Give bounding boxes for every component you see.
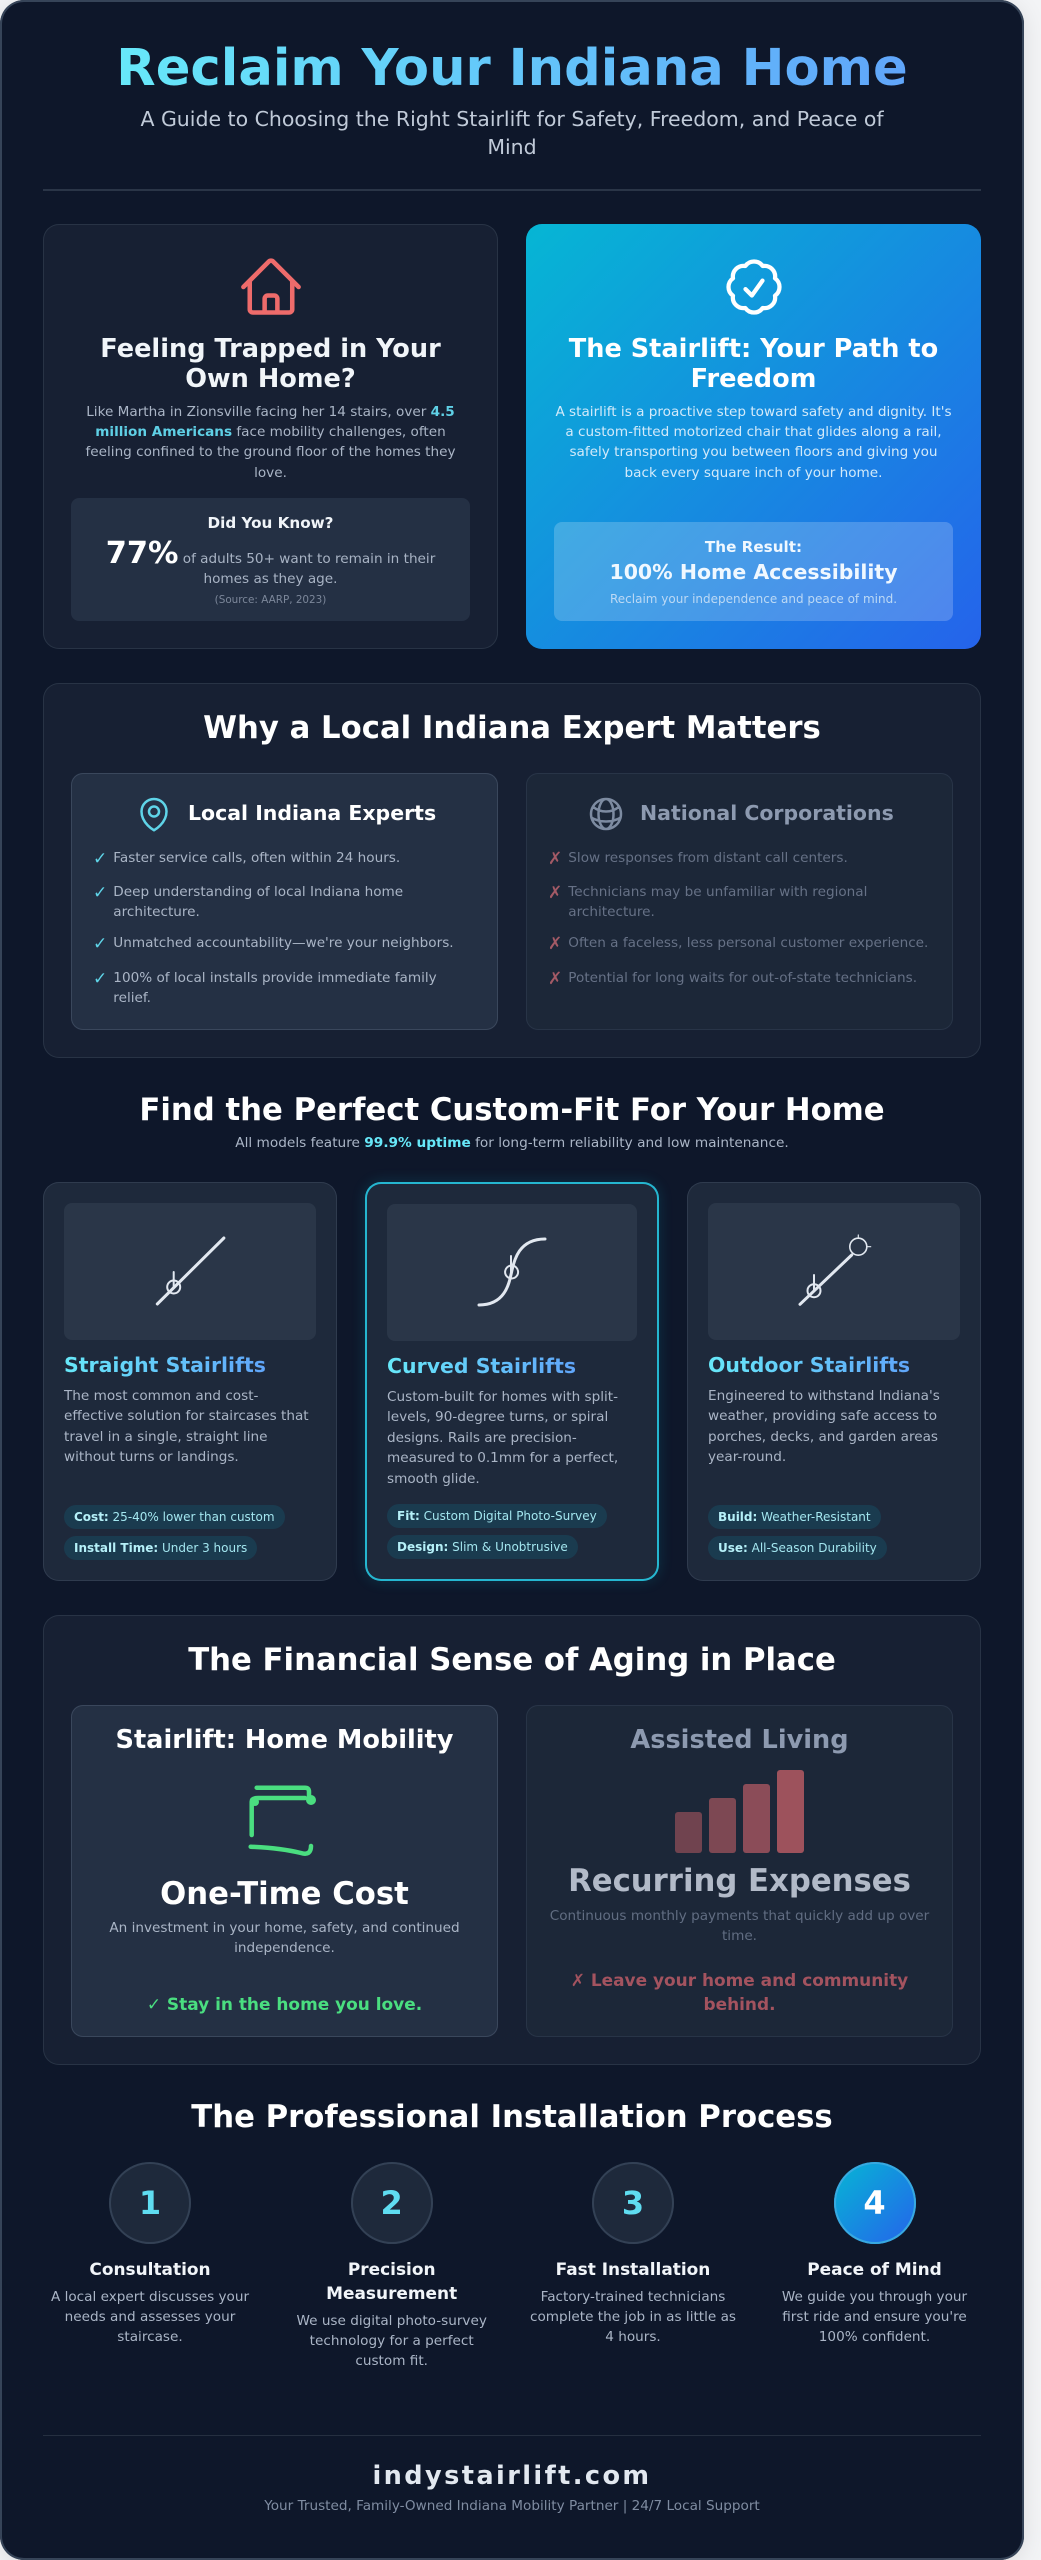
tag [708,1536,887,1560]
text block [86,404,456,481]
panel: feeling trapped [43,224,498,649]
subtitle: A Guide to Choosing the Right Stairlift for Safety, Freedom, and Peace of [140,107,884,131]
subtitle [140,107,884,159]
step 3 [530,2162,736,2345]
panel: local expert [43,683,981,1058]
icon panel: outdoor rail [708,1203,960,1340]
step number [109,2162,191,2244]
card: national corporations [526,773,953,1030]
card: curved stairlifts [365,1182,659,1581]
step text: staircase. [117,2329,183,2345]
card: assisted living [526,1705,953,2037]
card text [708,1388,940,1465]
tag: Design: Slim & Unobtrusive [397,1540,568,1554]
text block: love. [254,465,287,481]
card title: Outdoor Stairlifts [708,1353,910,1377]
tag [708,1505,881,1529]
section header: models [139,1092,885,1151]
list item: Slow responses from distant call centers. [568,850,848,866]
heading: Freedom [691,364,816,394]
card text: effective solution for staircases that [64,1408,309,1424]
drawback: behind. [703,1994,776,2014]
step 1 [51,2162,250,2345]
step number: 3 [622,2184,644,2222]
card text: levels, 90-degree turns, or spiral [387,1409,608,1425]
text block: million Americans face mobility challenges, often [95,424,446,440]
list item: Unmatched accountability—we're your neighbors. [113,935,454,951]
callout label: The Result: [705,538,802,556]
card text: Engineered to withstand Indiana's [708,1388,940,1404]
card text: smooth glide. [387,1471,480,1487]
tag [64,1536,257,1560]
callout value: 100% Home Accessibility [609,560,898,584]
step 4 [764,2161,984,2391]
description: time. [722,1928,757,1944]
list item: Potential for long waits for out-of-state technicians. [568,970,917,986]
step title [326,2258,457,2302]
text block: feeling confined to the ground floor of the homes they [86,444,456,460]
step title: Peace of Mind [807,2258,942,2278]
card title: Curved Stairlifts [387,1354,576,1378]
drawback: ✗ Leave your home and community [571,1970,908,1990]
tag: Cost: 25-40% lower than custom [74,1510,275,1524]
panel: financial sense [43,1615,981,2065]
text block [555,404,952,481]
list item: ✗ [548,968,562,988]
list item [93,883,403,920]
section subtitle: All models feature 99.9% uptime for long-term reliability and low maintenance. [235,1135,789,1151]
tag: Use: All-Season Durability [718,1541,877,1555]
description: independence. [234,1940,335,1956]
icon: check badge [726,259,782,315]
description [550,1908,930,1944]
heading [568,334,938,394]
tag: Install Time: Under 3 hours [74,1541,247,1555]
icon: wallet [248,1786,316,1856]
step number: 4 [863,2184,886,2222]
section heading: The Financial Sense of Aging in Place [188,1642,836,1678]
footer [43,2435,981,2520]
list item [548,883,867,920]
benefit: ✓ Stay in the home you love. [147,1994,422,2014]
card: local experts [71,773,498,1030]
step text: custom fit. [355,2353,428,2369]
step number: 2 [381,2184,403,2222]
statistic 77%: 77% of adults 50+ want to remain in their [106,536,435,570]
title: Reclaim Your Indiana Home [116,38,908,98]
list item: Faster service calls, often within 24 hours. [113,850,400,866]
callout note: Reclaim your independence and peace of mind. [610,592,897,606]
header [43,38,981,191]
list item: ✗ [548,934,562,954]
tag: Build: Weather-Resistant [718,1510,871,1524]
list item: ✓ [93,883,107,903]
tag [64,1505,285,1529]
section heading: Find the Perfect Custom-Fit For Your Home [139,1092,885,1128]
step title: Consultation [89,2258,211,2278]
tag: Fit: Custom Digital Photo-Survey [397,1509,597,1523]
subtitle: Mind [487,135,537,159]
step text [764,2286,984,2348]
list item: Often a faceless, less personal customer experience. [568,935,928,951]
card text: without turns or landings. [64,1449,239,1465]
step text: We guide you through your [782,2288,967,2304]
card text: designs. Rails are precision- [387,1430,577,1446]
drawback [571,1970,908,2014]
card text: travel in a single, straight line [64,1429,268,1445]
step text: We use digital photo-survey [296,2312,487,2328]
step title: Fast Installation [556,2258,710,2278]
step title: Measurement [326,2282,457,2302]
list item: ✓ [93,968,107,988]
text block: Like Martha in Zionsville facing her 14 stairs, over 4.5 [86,404,455,420]
list item: relief. [113,990,151,1006]
list item: 100% of local installs provide immediate family [113,970,437,986]
icon: map pin [140,798,168,832]
list item: ✗ [548,849,562,869]
list item: ✓ [93,849,107,869]
card text: measured to 0.1mm for a perfect, [387,1450,618,1466]
text block: a custom-fitted motorized chair that glides along a rail, [565,424,942,440]
statistic text: homes as they age. [204,570,338,586]
step text: needs and assesses your [65,2309,235,2325]
description: Continuous monthly payments that quickly add up over [550,1908,929,1924]
step text: complete the job in as little as [530,2309,736,2325]
list item: ✗ [548,883,562,903]
tag [387,1504,607,1528]
step text [51,2288,250,2345]
card title: Straight Stairlifts [64,1353,266,1377]
card text: Custom-built for homes with split- [387,1389,618,1405]
website: indystairlift.com [372,2461,652,2491]
card text: weather, providing safe access to [708,1408,937,1424]
step text: technology for a perfect [310,2333,474,2349]
tagline: Your Trusted, Family-Owned Indiana Mobility Partner | 24/7 Local Support [264,2498,760,2514]
heading: Own Home? [185,364,356,394]
text block: back every square inch of your home. [625,465,882,481]
description: An investment in your home, safety, and continued [109,1920,460,1936]
step 2 [296,2162,487,2369]
card heading: National Corporations [640,801,894,825]
list item: architecture. [568,904,655,920]
list item: architecture. [113,904,200,920]
step text [530,2288,736,2345]
step text: 100% confident. [819,2329,930,2345]
source: (Source: AARP, 2023) [215,594,326,606]
text block: safely transporting you between floors and giving you [569,444,938,460]
card: stairlift cost [71,1705,498,2037]
card text [64,1388,309,1465]
step text [296,2312,487,2369]
callout: did you know [71,498,470,621]
list item: ✓ [93,934,107,954]
list item [93,968,437,1006]
tag [387,1535,578,1559]
card text [387,1389,618,1487]
description [109,1920,460,1956]
card heading: Stairlift: Home Mobility [116,1725,453,1755]
cost figure: Recurring Expenses [568,1863,911,1899]
step number [592,2162,674,2244]
icon panel: straight rail [64,1203,316,1340]
step number [351,2162,433,2244]
card heading: Local Indiana Experts [188,801,436,825]
step number [834,2162,916,2244]
step title: Precision [348,2258,436,2278]
text block: A stairlift is a proactive step toward safety and dignity. It's [555,404,952,420]
callout heading: Did You Know? [208,514,333,532]
step text: 4 hours. [605,2329,661,2345]
section heading: Why a Local Indiana Expert Matters [203,710,821,746]
step number: 1 [139,2184,161,2222]
heading: The Stairlift: Your Path to [569,334,938,364]
card heading: Assisted Living [630,1725,849,1755]
heading [100,334,441,394]
section heading: installation process: The Professional Installation Process [191,2099,833,2135]
step text: first ride and ensure you're [782,2309,967,2325]
list item: Deep understanding of local Indiana home [113,884,403,900]
card text: porches, decks, and garden areas [708,1429,938,1445]
heading: Feeling Trapped in Your [100,334,441,364]
card text: The most common and cost- [64,1388,258,1404]
panel: the stairlift [526,224,981,649]
icon panel: curved rail [387,1204,637,1341]
icon: house [241,258,301,315]
icon: globe [590,798,622,830]
cost figure: One-Time Cost [160,1876,409,1912]
step text: A local expert discusses your [51,2288,249,2304]
callout: the result [554,522,953,621]
bar chart [675,1770,804,1853]
card: straight stairlifts [43,1182,337,1581]
step text: Factory-trained technicians [541,2288,725,2304]
card text: year-round. [708,1449,786,1465]
card: outdoor stairlifts [687,1182,981,1581]
list item: Technicians may be unfamiliar with regional [568,884,867,900]
